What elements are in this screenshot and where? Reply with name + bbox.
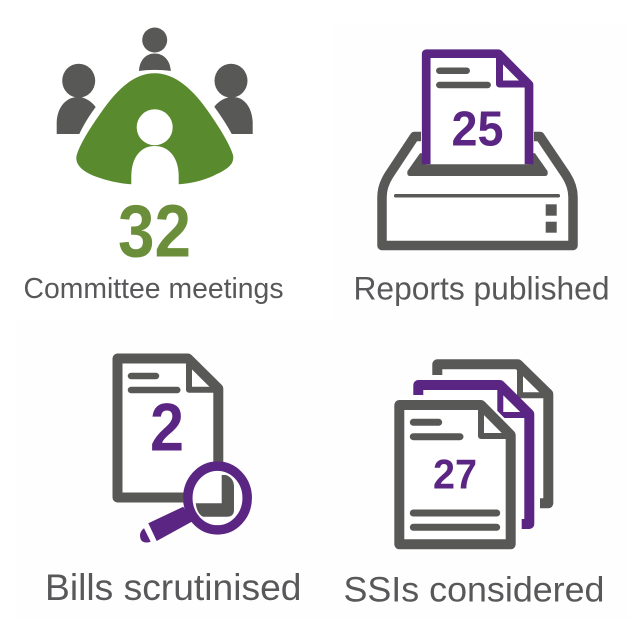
icon: stack of documents	[399, 362, 548, 544]
number: 25: 25	[452, 103, 504, 157]
icon: document with magnifying glass	[118, 358, 252, 543]
number: 2: 2	[150, 390, 184, 466]
panel: reports published	[354, 54, 610, 307]
panel: bills scrutinised	[45, 358, 302, 608]
number: 27: 27	[433, 450, 477, 497]
panel: SSIs considered	[344, 362, 604, 610]
number: 32: 32	[118, 190, 191, 273]
label: Committee meetings: Committee meetings	[24, 273, 284, 305]
panel: committee meetings	[24, 28, 284, 305]
icon: document in tray	[382, 54, 573, 246]
label: SSIs considered: SSIs considered	[344, 570, 604, 610]
icon: people around a table	[57, 28, 253, 186]
label: Reports published: Reports published	[354, 270, 610, 306]
label: Bills scrutinised: Bills scrutinised	[45, 567, 302, 608]
